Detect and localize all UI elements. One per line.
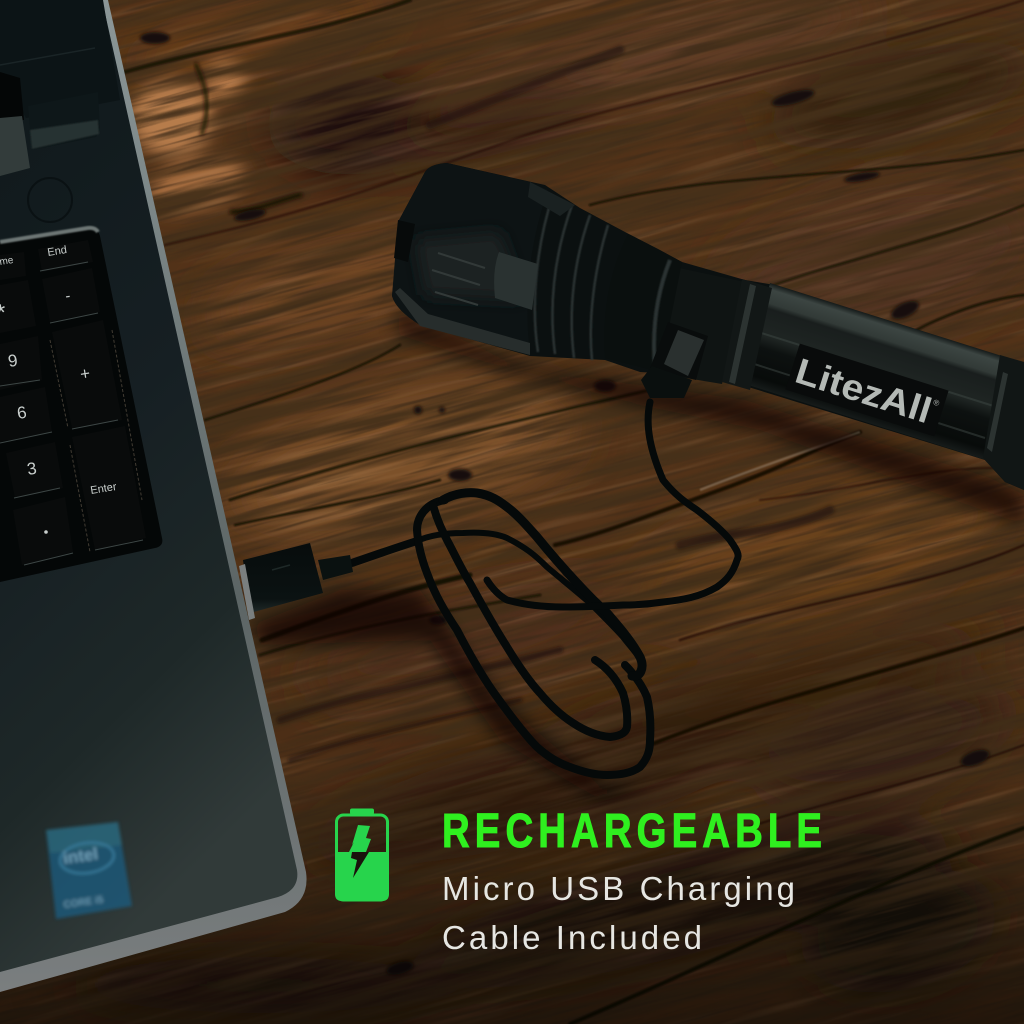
laptop silver edge <box>0 0 307 992</box>
keypad labels: - <box>64 287 72 305</box>
keypad labels: + <box>79 364 92 384</box>
soft dark wood streaks <box>280 50 830 760</box>
charging callout <box>335 805 822 956</box>
keypad labels: End <box>47 244 68 259</box>
cable bundle: outer loop <box>417 500 650 775</box>
text: micro usb charging: Micro USB Charging <box>442 870 795 907</box>
icon: battery with lightning bolt <box>335 808 389 901</box>
brand logo: ® <box>932 398 941 408</box>
knots <box>140 32 991 977</box>
bright wood patch by knot <box>130 58 249 220</box>
main body tube <box>745 283 1024 472</box>
neck knurled section <box>650 265 745 384</box>
shadow of flashlight and cable <box>252 310 1024 800</box>
brand logo: LitezAll <box>791 350 937 431</box>
brand logo <box>785 344 949 436</box>
laptop deck <box>0 0 297 972</box>
tail ring <box>983 355 1024 490</box>
cable bundle: inner loop <box>433 505 627 737</box>
usb cable <box>352 402 738 775</box>
numeric keypad <box>0 228 162 582</box>
keypad labels <box>0 244 118 534</box>
keypad labels: Enter <box>90 481 118 497</box>
flashlight <box>392 163 1024 490</box>
cable to flashlight <box>487 402 738 607</box>
tube side highlight <box>748 330 1000 438</box>
light worn plank edge <box>700 432 860 490</box>
intel sticker: intel <box>62 844 99 868</box>
bezel rings <box>535 195 608 360</box>
usb-a plug <box>239 543 353 620</box>
flashlight silhouette <box>392 163 1024 490</box>
laptop <box>0 0 307 992</box>
hinge <box>0 0 120 176</box>
keypad labels: 9 <box>7 351 19 371</box>
keypad labels: 6 <box>16 403 28 423</box>
power button <box>28 178 72 222</box>
text: cable included: Cable Included <box>442 919 702 956</box>
charging port and micro usb plug <box>641 322 708 398</box>
cable bundle: middle strand <box>417 533 643 667</box>
heading: rechargeable: RECHARGEABLE <box>442 805 822 858</box>
intel sticker: CORE i5 <box>63 894 104 911</box>
bottom darkening <box>0 540 1024 1024</box>
cable to laptop <box>352 541 417 563</box>
grip head <box>392 163 575 355</box>
intel sticker <box>46 822 132 919</box>
keypad labels: 3 <box>26 459 38 479</box>
cable bundle: top strand <box>443 493 642 676</box>
